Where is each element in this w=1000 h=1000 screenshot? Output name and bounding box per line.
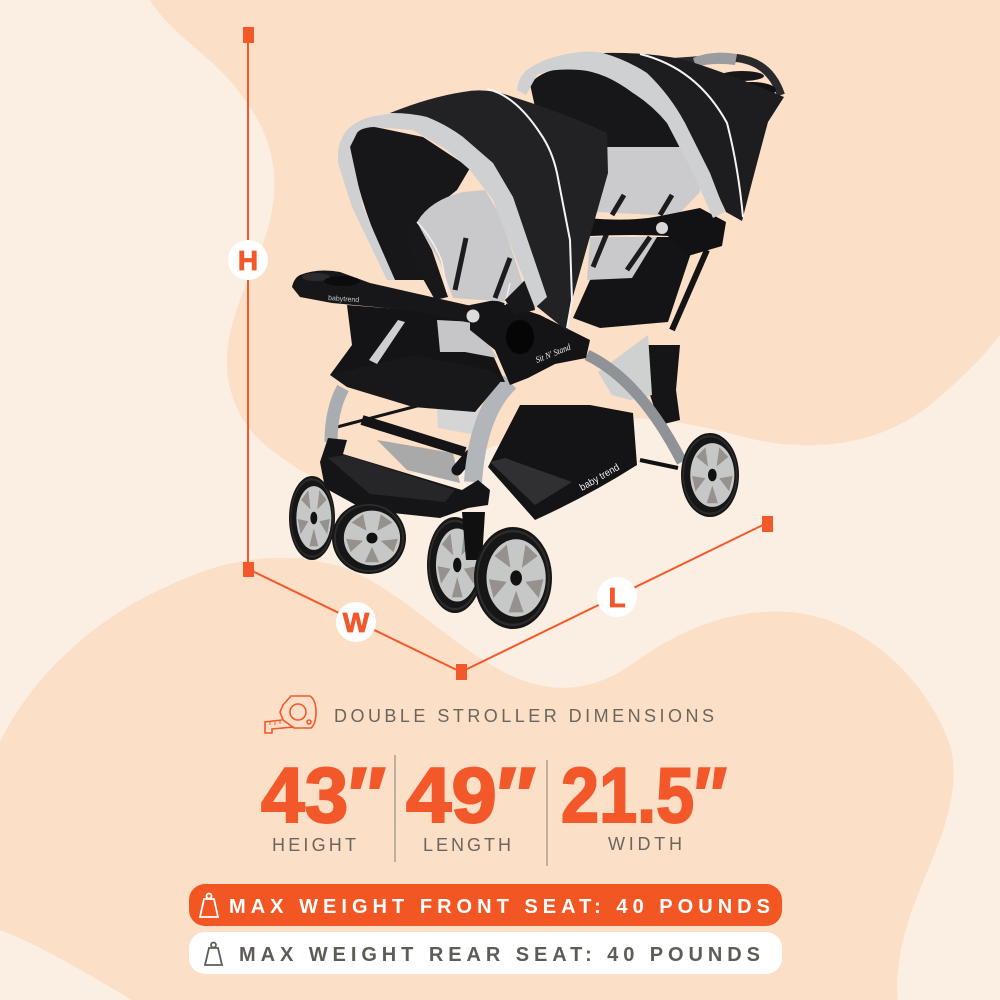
rear seat lower <box>573 195 693 328</box>
dimension label: L: L <box>608 582 626 613</box>
front seat base <box>330 355 502 412</box>
front wheel pair, left <box>332 502 406 574</box>
stroller <box>289 52 784 629</box>
front big wheel <box>474 527 552 629</box>
stat: length: 49″ <box>406 751 536 839</box>
rear wheel, right <box>681 433 739 517</box>
stat: width: WIDTH <box>608 834 682 854</box>
heading: DOUBLE STROLLER DIMENSIONS <box>334 706 714 726</box>
front canopy piping <box>487 89 572 328</box>
dimension label: H: H <box>238 245 258 276</box>
stat: height: HEIGHT <box>272 835 356 855</box>
rear tray <box>588 208 726 256</box>
divider <box>546 760 548 866</box>
rear frame and support <box>640 250 707 468</box>
divider <box>394 755 396 862</box>
pill: front seat weight <box>189 884 782 926</box>
pill: rear seat weight <box>189 932 782 974</box>
footboard <box>320 438 490 518</box>
front seat back lower <box>437 320 497 358</box>
lower seat rack <box>337 400 484 483</box>
rear canopy piping <box>640 54 743 217</box>
pill: rear seat weight: MAX WEIGHT REAR SEAT: 40 POUNDS <box>239 944 760 966</box>
silver front leg, left <box>331 388 343 442</box>
dimension label: W <box>336 602 376 642</box>
icon: tape measure <box>265 696 316 733</box>
stat: length: LENGTH <box>423 835 511 855</box>
icon: weight <box>205 942 222 965</box>
silver rear tube <box>587 355 682 462</box>
rear seat pad <box>596 142 700 216</box>
tray hub and side frame <box>470 300 590 385</box>
background blob: bottom <box>0 558 954 1000</box>
dimension lines <box>248 35 767 672</box>
stat: height: 43″ <box>261 751 386 839</box>
stat: width: 21.5″ <box>561 751 727 839</box>
tray logo: babytrend <box>328 295 360 304</box>
front seat pad <box>417 190 525 302</box>
basket logo: baby trend <box>578 462 622 494</box>
script logo: Sit N' Stand <box>534 342 572 365</box>
front canopy shell <box>390 90 608 331</box>
rear canopy shell <box>603 53 784 221</box>
pill: front seat weight: MAX WEIGHT FRONT SEAT: 40 POUNDS <box>229 896 770 918</box>
rear canopy interior <box>530 68 684 180</box>
icon: weight <box>200 894 218 917</box>
reflector strip <box>369 320 405 364</box>
silver front tube, right <box>473 382 510 482</box>
front tray <box>292 271 480 324</box>
frame behind tray <box>330 305 505 382</box>
dimension label: W: W <box>343 607 370 638</box>
rear canopy trim <box>517 52 725 218</box>
dimension label: L <box>597 577 637 617</box>
background blob: top <box>150 0 1000 483</box>
dimension label: H <box>228 240 268 280</box>
dimension end markers <box>243 27 773 680</box>
back wheels, front axle <box>289 476 335 560</box>
rear handle and console <box>673 53 781 98</box>
rear net panel <box>598 335 652 400</box>
basket <box>488 405 637 520</box>
front seat side panel <box>405 222 535 315</box>
front spring <box>462 512 485 560</box>
front canopy interior <box>350 127 470 280</box>
front canopy trim <box>338 113 547 308</box>
